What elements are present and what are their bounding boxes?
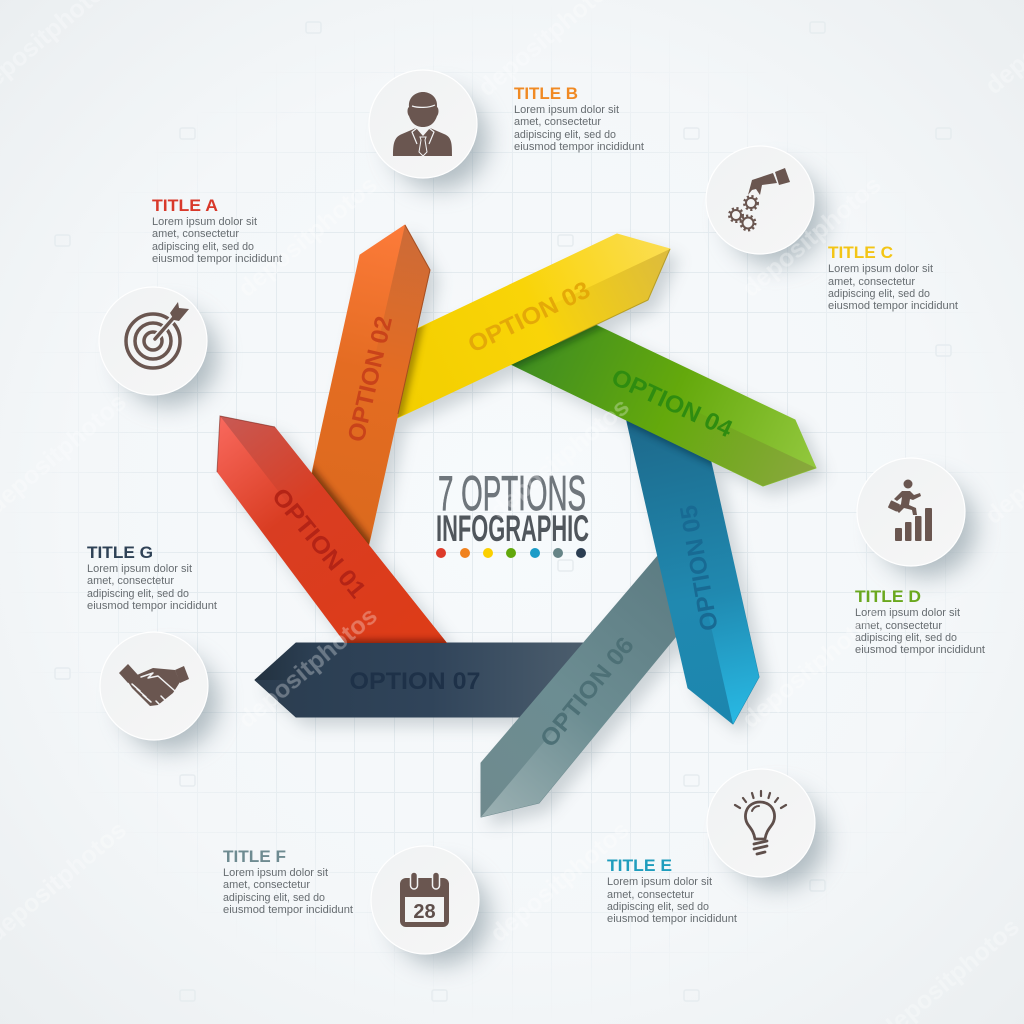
icon: man climbing bars xyxy=(888,480,932,541)
arrow: option 01: OPTION 01 xyxy=(266,483,371,603)
text: title C: amet, consectetur xyxy=(828,276,915,288)
panel: title F xyxy=(223,846,490,965)
text: title E: adipiscing elit, sed do xyxy=(607,901,709,913)
center title: INFOGRAPHIC xyxy=(436,507,589,549)
circle shadow xyxy=(878,479,976,577)
text: title A: TITLE A xyxy=(152,196,218,215)
text: title G xyxy=(87,543,217,612)
text: title C: Lorem ipsum dolor sit xyxy=(828,263,933,275)
text: title A: Lorem ipsum dolor sit xyxy=(152,216,257,228)
text: title B: adipiscing elit, sed do xyxy=(514,129,616,141)
arrow ground shadows xyxy=(226,234,825,826)
panel: title D xyxy=(855,458,985,656)
text: title G: eiusmod tempor incididunt xyxy=(87,600,217,612)
arrow: option 06: OPTION 06 xyxy=(535,632,640,752)
icon: target xyxy=(126,302,189,368)
badge xyxy=(707,769,815,877)
circle shadow xyxy=(727,167,825,265)
circle shadow xyxy=(392,867,490,965)
arrow: option 04 xyxy=(511,325,816,486)
arrow: option 03 xyxy=(397,234,670,418)
arrow: option 04: OPTION 04 xyxy=(607,364,737,443)
circle shadow xyxy=(728,790,826,888)
arrow: option 07 xyxy=(255,643,600,717)
panel: title C xyxy=(706,146,958,312)
circle shadow xyxy=(120,308,218,406)
text: title E: amet, consectetur xyxy=(607,889,694,901)
text: title E: Lorem ipsum dolor sit xyxy=(607,876,712,888)
text: title D xyxy=(855,587,985,656)
circle shadow xyxy=(390,91,488,189)
text: title D: Lorem ipsum dolor sit xyxy=(855,607,960,619)
watermarks: depositphotos xyxy=(485,816,635,948)
watermarks: depositphotos xyxy=(485,393,635,525)
icon: calendar: 28 xyxy=(413,901,436,923)
center title: 7 OPTIONS xyxy=(438,467,586,521)
badge xyxy=(100,632,208,740)
text: title G: TITLE G xyxy=(87,543,153,562)
text: title F: TITLE F xyxy=(223,847,286,866)
arrow: option 05: OPTION 05 xyxy=(675,503,724,633)
badge xyxy=(706,146,814,254)
icon: businessman xyxy=(393,92,452,156)
arrow: option 02: OPTION 02 xyxy=(343,314,398,445)
text: title G: amet, consectetur xyxy=(87,575,174,587)
icon: hand with gears xyxy=(729,168,790,230)
panel: title G xyxy=(87,543,219,751)
text: title A: adipiscing elit, sed do xyxy=(152,241,254,253)
arrow: option 06 xyxy=(480,556,676,818)
text: title D: amet, consectetur xyxy=(855,620,942,632)
arrow: option 01 xyxy=(216,415,447,643)
text: title G: adipiscing elit, sed do xyxy=(87,588,189,600)
text: title G: Lorem ipsum dolor sit xyxy=(87,563,192,575)
text: title B: eiusmod tempor incididunt xyxy=(514,141,644,153)
watermarks: depositphotos xyxy=(737,602,887,734)
text: title B: Lorem ipsum dolor sit xyxy=(514,104,619,116)
colour dots xyxy=(436,548,586,558)
watermarks: depositphotos xyxy=(233,602,383,734)
panel: title E xyxy=(607,769,826,925)
badge xyxy=(99,287,207,395)
arrow: option 02 xyxy=(312,224,430,546)
text: title E: eiusmod tempor incididunt xyxy=(607,913,737,925)
icon: calendar xyxy=(400,872,449,927)
text: title C: TITLE C xyxy=(828,243,893,262)
text: title F: amet, consectetur xyxy=(223,879,310,891)
text: title D: TITLE D xyxy=(855,587,921,606)
text: title B: amet, consectetur xyxy=(514,116,601,128)
badge xyxy=(371,846,479,954)
text: title F xyxy=(223,847,353,916)
text: title C: adipiscing elit, sed do xyxy=(828,288,930,300)
badge xyxy=(857,458,965,566)
text: title A xyxy=(152,196,282,265)
arrow: option 03: OPTION 03 xyxy=(464,276,594,359)
panel: title A xyxy=(99,196,282,406)
icon: light bulb xyxy=(735,791,786,854)
text: title A: amet, consectetur xyxy=(152,228,239,240)
watermarks: depositphotos xyxy=(233,171,383,303)
arrow: option 05 xyxy=(626,420,760,724)
text: title A: eiusmod tempor incididunt xyxy=(152,253,282,265)
text: title F: Lorem ipsum dolor sit xyxy=(223,867,328,879)
icon: handshake xyxy=(119,664,189,706)
text: title F: eiusmod tempor incididunt xyxy=(223,904,353,916)
center title xyxy=(436,467,589,558)
text: title F: adipiscing elit, sed do xyxy=(223,892,325,904)
text: title C xyxy=(828,243,958,312)
text: title D: eiusmod tempor incididunt xyxy=(855,644,985,656)
panel: title B xyxy=(369,70,644,189)
arrow: option 07: OPTION 07 xyxy=(350,668,480,695)
text: title E: TITLE E xyxy=(607,856,672,875)
circle shadow xyxy=(121,653,219,751)
text: title B: TITLE B xyxy=(514,84,578,103)
badge xyxy=(369,70,477,178)
text: title D: adipiscing elit, sed do xyxy=(855,632,957,644)
text: title C: eiusmod tempor incididunt xyxy=(828,300,958,312)
watermarks: depositphotos xyxy=(737,171,887,303)
text: title E xyxy=(607,856,737,925)
text: title B xyxy=(514,84,644,153)
